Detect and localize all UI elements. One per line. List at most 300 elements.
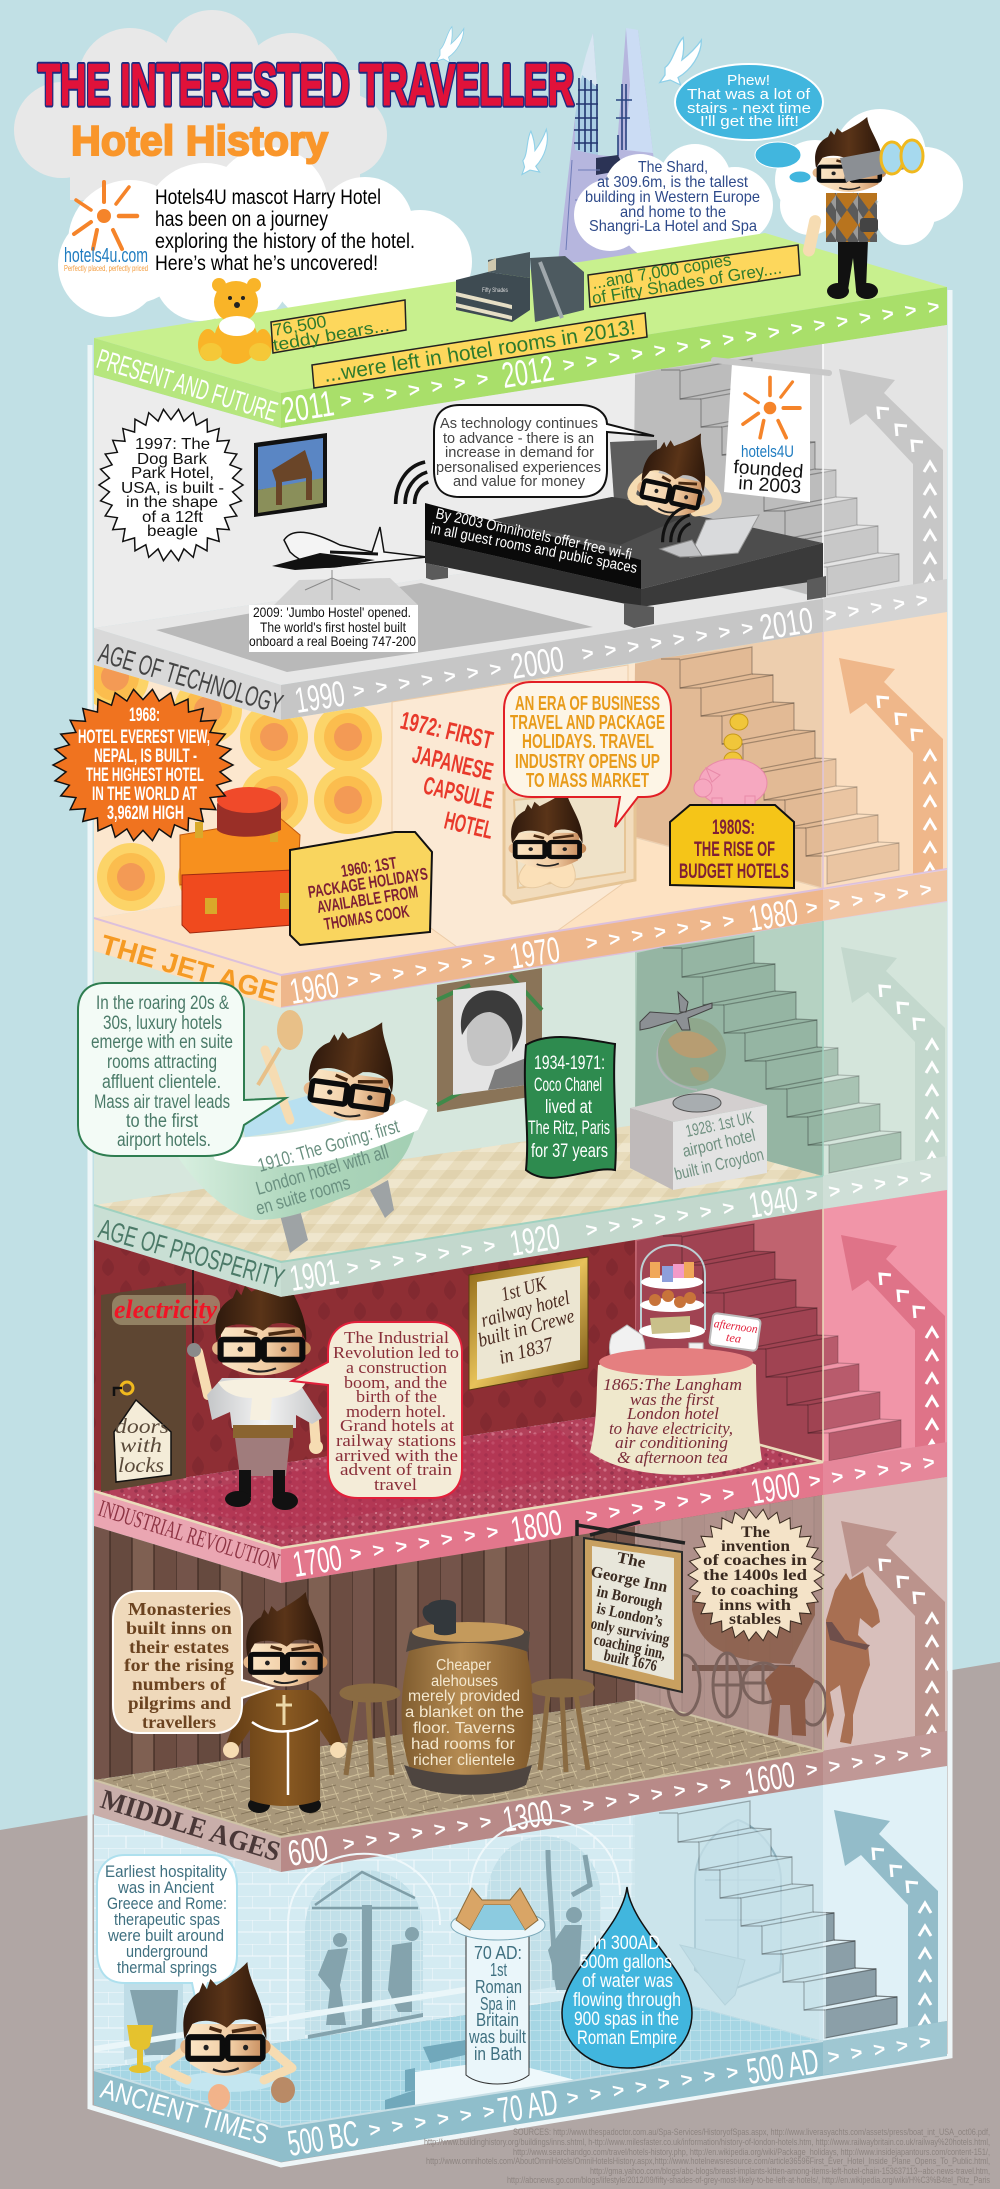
sign: Coco Chanel at the Ritz: Coco Chanel	[534, 1075, 602, 1096]
sign: Coco Chanel at the Ritz: The Ritz, Paris	[528, 1118, 610, 1139]
slab band: 1300	[500, 1792, 556, 1840]
sign: George Inn: only surviving	[589, 1615, 671, 1649]
icon: coins	[724, 714, 748, 768]
arrow	[839, 369, 943, 590]
pillar: Roman spa in Bath: Spa in	[480, 1994, 516, 2014]
slab band: >>>>>>>	[584, 1481, 747, 1528]
sign: Omnihotels wifi: By 2003 Omnihotels offer free wi-fi	[434, 505, 633, 563]
speech bubble: industrial revolution: a construction	[346, 1358, 448, 1377]
sign: George Inn	[577, 1520, 685, 1692]
slab band: 1920	[507, 1216, 563, 1264]
box: rise of budget hotels: BUDGET HOTELS	[679, 860, 789, 883]
icon: stack of books	[456, 252, 584, 322]
starburst: Hotel Everest View: IN THE WORLD AT	[92, 784, 197, 805]
stairs	[635, 902, 947, 1176]
speech bubble: earliest hospitality	[97, 1855, 237, 2012]
pedestal with globe: built in Croydon	[673, 1145, 766, 1184]
sign: Coco Chanel at the Ritz: for 37 years	[531, 1141, 608, 1162]
icon: teapot and cups	[610, 1325, 703, 1370]
speech bubble: roaring 20s: airport hotels.	[117, 1130, 211, 1151]
capsule pod	[504, 775, 635, 903]
Shard cloud and fact: and home to the	[620, 204, 726, 221]
icon: golden goblet	[127, 2025, 153, 2073]
speech bubble: technology: As technology continues	[440, 415, 598, 432]
speech bubble: monasteries: Monasteries	[128, 1599, 231, 1619]
barrel: merely provided	[408, 1688, 520, 1705]
plaque: Jumbo Hostel: The world's first hostel built	[260, 619, 406, 635]
table with cloth: 1865:The Langham	[603, 1375, 742, 1394]
starburst: invention of coaches	[688, 1509, 824, 1641]
tag: afternoon tea	[709, 1313, 761, 1351]
table with cloth: to have electricity,	[609, 1419, 733, 1438]
icon: key and door tag: locks	[118, 1453, 164, 1477]
pedestal with globe: airport hotel	[681, 1126, 757, 1161]
icon: suitcases	[180, 818, 300, 933]
slab band: >>>>>	[826, 2029, 944, 2069]
speech bubble: roaring 20s: Mass air travel leads	[94, 1092, 230, 1113]
bed	[425, 440, 826, 628]
painting: Coco Chanel	[437, 968, 542, 1112]
slab band: >>>>>	[823, 587, 941, 627]
banner: founded in 2003: founded	[733, 457, 804, 483]
barrel: floor. Taverns	[413, 1720, 515, 1737]
icon: piggy bank	[694, 759, 767, 812]
speech bubble: business travel	[504, 682, 671, 827]
speech bubble: roaring 20s: to the first	[126, 1111, 199, 1132]
arrow	[839, 658, 943, 879]
picture: railway hotel: in 1837	[497, 1333, 556, 1369]
starburst: invention of coaches: to coaching	[711, 1582, 798, 1599]
title cloud	[14, 10, 387, 200]
pillar: Roman spa in Bath	[451, 1888, 545, 2084]
room walls	[94, 325, 947, 685]
mascot with binoculars	[802, 117, 923, 299]
speech bubble: earliest hospitality: underground	[126, 1942, 208, 1961]
slab band: 600	[285, 1827, 331, 1874]
icon: doves	[437, 27, 701, 177]
icon: The Shard tower	[558, 28, 660, 262]
icon: laptop	[660, 515, 759, 557]
slab band: 1800	[508, 1501, 565, 1550]
roof band: PRESENT AND FUTURE	[93, 343, 281, 427]
slab band: ANCIENT TIMES	[97, 2073, 272, 2150]
room walls	[94, 902, 947, 1262]
water drop: Roman Empire fact: flowing through	[573, 1990, 681, 2011]
slab band: >>>>>>>>	[580, 615, 766, 666]
intro text	[155, 186, 415, 275]
sign: Coco Chanel at the Ritz: lived at	[545, 1097, 593, 1118]
speech bubble: industrial revolution: arrived with the	[335, 1446, 458, 1465]
speech bubble: Phew	[675, 64, 823, 183]
sign: George Inn: built 1676	[602, 1647, 659, 1675]
panel: age of prosperity room	[78, 902, 947, 1299]
logo: hotels4u.com: hotels4u.com	[64, 245, 148, 267]
mascot: monk	[223, 1592, 346, 1813]
wall arches and silhouettes	[124, 1820, 620, 2060]
icon: cake stand	[639, 1245, 705, 1339]
pillar: Roman spa in Bath: 70 AD:	[474, 1943, 522, 1963]
sources text	[424, 2127, 990, 2185]
starburst: invention of coaches: invention	[721, 1538, 790, 1555]
frame of building	[90, 290, 950, 2165]
intro text: Hotels4U mascot Harry Hotel	[155, 186, 381, 209]
room walls	[94, 1766, 947, 2127]
speech bubble: earliest hospitality: was in Ancient	[117, 1878, 214, 1897]
stairs	[635, 1190, 947, 1464]
arrow	[841, 947, 945, 1168]
speech bubble: industrial revolution: birth of the	[356, 1387, 437, 1406]
sign: left in hotel rooms: ...were left in hotel rooms in 2013!	[322, 316, 637, 387]
starburst: Dog Bark Park Hotel: beagle	[147, 523, 198, 540]
arrow	[841, 1235, 945, 1456]
banner: founded in 2003	[714, 360, 829, 502]
table with cloth: air conditioning	[615, 1433, 728, 1452]
table with cloth	[590, 1348, 762, 1475]
room walls	[94, 612, 947, 975]
sign: Fifty Shades: of Fifty Shades of Grey....	[591, 258, 783, 308]
speech bubble: monasteries: for the rising	[124, 1655, 234, 1675]
starburst: Dog Bark Park Hotel	[99, 409, 243, 561]
starburst: Hotel Everest View: 3,962M HIGH	[107, 803, 184, 824]
slab band: >>>>>>	[367, 2099, 508, 2142]
slab band	[94, 579, 947, 721]
sign: George Inn: is London’s	[595, 1600, 664, 1631]
arrow	[841, 1521, 945, 1742]
panel: roof, present and future	[93, 117, 952, 431]
pillar: Roman spa in Bath: Britain	[476, 2010, 519, 2030]
speech bubble: technology: personalised experiences	[436, 459, 601, 476]
slab band	[94, 1411, 948, 1585]
picture: railway hotel: 1st UK	[499, 1272, 550, 1306]
Shard cloud and fact: at 309.6m, is the tallest	[597, 174, 749, 191]
icon: key and door tag	[114, 1382, 171, 1482]
stairs	[633, 325, 947, 599]
speech bubble: business travel: TRAVEL AND PACKAGE	[510, 712, 665, 734]
text: electricity: electricity	[114, 1295, 217, 1324]
subtitle: Hotel History	[71, 117, 329, 164]
speech bubble: technology: to advance - there is an	[443, 430, 594, 447]
intro text: exploring the history of the hotel.	[155, 230, 415, 253]
stairs	[633, 612, 947, 889]
slab band	[94, 1495, 947, 1874]
text: 1972 capsule hotel	[398, 707, 496, 845]
title: THE INTERESTED TRAVELLER	[38, 53, 574, 118]
text: 1972 capsule hotel: HOTEL	[442, 807, 496, 845]
box: package holidays: PACKAGE HOLIDAYS	[307, 864, 429, 902]
starburst: Dog Bark Park Hotel: Dog Bark	[137, 451, 208, 468]
slab band: >>>>>>>	[345, 946, 508, 993]
water drop: Roman Empire fact: In 300AD	[593, 1933, 660, 1954]
slab band: AGE OF PROSPERITY	[95, 1213, 288, 1294]
icon: carriage and small horse	[668, 1595, 826, 1736]
pedestal with globe	[630, 1018, 767, 1190]
slab band	[94, 2021, 947, 2164]
picture: railway hotel: built in Crewe	[476, 1305, 577, 1352]
speech bubble: business travel: INDUSTRY OPENS UP	[515, 751, 660, 773]
slab band: AGE OF TECHNOLOGY	[95, 637, 287, 720]
speech bubble: monasteries	[113, 1591, 272, 1733]
text: 1972 capsule hotel: CAPSULE	[421, 772, 496, 815]
roof band: >>>>>>>>>>>>>>>>>	[561, 294, 952, 377]
text: 1972 capsule hotel: 1972: FIRST	[398, 707, 496, 755]
water drop: Roman Empire fact: Roman Empire	[577, 2028, 677, 2049]
text: 1972 capsule hotel: JAPANESE	[410, 741, 496, 786]
ground	[0, 1662, 1000, 2189]
icon: model plane	[640, 992, 712, 1030]
door	[101, 1283, 220, 1492]
box: rise of budget hotels: THE RISE OF	[694, 838, 775, 861]
starburst: Dog Bark Park Hotel: in the shape	[126, 494, 218, 511]
sign: George Inn: coaching inn,	[592, 1631, 667, 1663]
icon: teddy bear	[198, 278, 272, 364]
logo: hotels4u.com: Perfectly placed, perfectly priced	[64, 264, 148, 273]
table with cloth: London hotel	[626, 1404, 719, 1423]
speech bubble: industrial revolution: Revolution led to	[333, 1343, 459, 1362]
panel: middle ages room	[94, 1477, 947, 1874]
slab band: 500 AD	[744, 2040, 821, 2092]
intro text: has been on a journey	[155, 208, 328, 231]
plaque: Jumbo Hostel	[249, 604, 418, 652]
photo: dog hotel	[254, 433, 327, 517]
box: package holidays	[290, 832, 432, 945]
stairs	[631, 1801, 897, 2041]
pool steps and platform	[94, 1986, 594, 2118]
speech bubble: roaring 20s: affluent clientele.	[102, 1072, 221, 1093]
starburst: invention of coaches: inns with	[719, 1597, 791, 1614]
icon: key and door tag: with	[120, 1433, 162, 1457]
slab band: >>>>>>	[804, 877, 945, 920]
speech bubble: monasteries: numbers of	[132, 1674, 227, 1694]
speech bubble: industrial revolution: modern hotel.	[346, 1402, 446, 1421]
box: package holidays: AVAILABLE FROM	[316, 882, 419, 917]
icon: wifi	[396, 462, 428, 504]
slab band: 1940	[746, 1178, 801, 1226]
title: THE INTERESTED TRAVELLER	[38, 53, 574, 118]
speech bubble: industrial revolution: advent of train	[340, 1460, 453, 1479]
mascot in pool	[160, 1962, 295, 2110]
starburst: Dog Bark Park Hotel: Park Hotel,	[131, 465, 214, 482]
speech bubble: business travel: AN ERA OF BUSINESS	[515, 693, 660, 715]
bath with mascot: 1910: The Goring: first	[256, 1116, 402, 1177]
slab band: 2010	[757, 599, 816, 648]
thought cloud behind mascot	[775, 109, 963, 245]
bath with mascot: London hotel with all	[254, 1142, 391, 1200]
barrel: Cheaper	[436, 1657, 492, 1674]
box: package holidays: 1960: 1ST	[340, 853, 398, 881]
slab band: >>>>>>	[807, 1450, 948, 1493]
icon: stools	[342, 1681, 592, 1777]
slab band: >>>>>>>	[351, 656, 514, 703]
barrel: alehouses	[431, 1673, 498, 1690]
speech bubble: roaring 20s: In the roaring 20s &	[96, 993, 229, 1014]
speech bubble: industrial revolution	[292, 1322, 462, 1498]
speech bubble: roaring 20s	[78, 983, 286, 1156]
banner: founded in 2003: hotels4U	[741, 442, 794, 461]
roof band: 2011	[279, 382, 337, 431]
table with cloth: was the first	[630, 1390, 715, 1409]
sign: Fifty Shades: ...and 7,000 copies	[590, 250, 733, 293]
Shard cloud and fact: The Shard,	[638, 159, 708, 176]
starburst: Hotel Everest View: THE HIGHEST HOTEL	[86, 765, 204, 786]
speech bubble: Phew: I'll get the lift!	[700, 113, 799, 130]
room walls	[94, 1190, 947, 1548]
speech bubble: industrial revolution: The Industrial	[344, 1328, 449, 1347]
icon: key and door tag: doors	[115, 1414, 169, 1438]
sign: Omnihotels wifi	[425, 503, 641, 589]
slab band: 1960	[287, 964, 342, 1012]
speech bubble: earliest hospitality: therapeutic spas	[114, 1910, 220, 1929]
speech bubble: Phew: Phew!	[727, 72, 770, 89]
arrow	[834, 1810, 938, 2031]
barrel	[402, 1600, 533, 1795]
title	[38, 53, 574, 118]
slab band: >>>>>>>	[341, 1809, 504, 1856]
slab band	[94, 869, 947, 1012]
water drop: Roman Empire fact: 500m gallons	[580, 1952, 672, 1973]
box: rise of budget hotels	[670, 805, 794, 888]
room walls	[94, 1477, 947, 1837]
mascot: Victorian	[187, 1270, 323, 1510]
speech bubble: earliest hospitality: Greece and Rome:	[107, 1894, 227, 1913]
sign: 76,500 teddy bears: 76,500	[271, 312, 328, 340]
wallpaper circles	[94, 665, 382, 911]
speech bubble: roaring 20s: rooms attracting	[107, 1052, 217, 1073]
pedestal with globe: 1928: 1st UK	[684, 1108, 756, 1141]
speech bubble: technology: increase in demand for	[445, 444, 594, 461]
plaque: Jumbo Hostel: 2009: 'Jumbo Hostel' opened.	[253, 604, 411, 620]
barrel: had rooms for	[411, 1736, 516, 1753]
roof top	[94, 233, 947, 393]
starburst: Hotel Everest View	[53, 689, 233, 841]
logo: hotels4u.com	[64, 182, 148, 273]
subtitle cloud: intro	[58, 147, 472, 325]
sign: George Inn: The	[615, 1549, 647, 1572]
icon: plane on stand	[272, 527, 427, 605]
starburst: Hotel Everest View: HOTEL EVEREST VIEW,	[78, 727, 210, 748]
slab band: 1600	[742, 1754, 798, 1802]
tag: afternoon tea: afternoon	[713, 1316, 759, 1336]
table with cloth: & afternoon tea	[617, 1448, 728, 1467]
intro text: Here’s what he’s uncovered!	[155, 252, 378, 275]
panel: age of technology room	[94, 325, 947, 721]
speech bubble: industrial revolution: boom, and the	[344, 1373, 447, 1392]
slab band: >>>>>>>	[584, 908, 747, 955]
speech bubble: Phew: That was a lot of	[687, 86, 811, 103]
mascot on bed	[632, 423, 718, 522]
speech bubble: earliest hospitality: thermal springs	[117, 1958, 217, 1977]
sign: George Inn: George Inn	[589, 1563, 669, 1596]
slab band: 1900	[748, 1464, 803, 1512]
slab band: 1970	[507, 929, 563, 977]
slab band: 1980	[746, 891, 801, 939]
speech bubble: business travel: TO MASS MARKET	[526, 770, 649, 792]
panel: industrial revolution room	[94, 1190, 948, 1585]
speech bubble: earliest hospitality: were built around	[107, 1926, 224, 1945]
speech bubble: industrial revolution: railway stations	[336, 1431, 456, 1450]
box: package holidays: THOMAS COOK	[323, 902, 411, 934]
pillar: Roman spa in Bath: was built	[468, 2027, 526, 2047]
sign: Coco Chanel at the Ritz	[525, 1037, 616, 1178]
starburst: invention of coaches: The	[741, 1524, 770, 1541]
sign: Coco Chanel at the Ritz: 1934-1971:	[534, 1053, 605, 1074]
slab band: >>>>>>>	[348, 1519, 511, 1566]
speech bubble: technology: and value for money	[453, 473, 585, 490]
slab band: >>>>>>>	[584, 1195, 747, 1242]
Shard cloud and fact	[574, 144, 773, 260]
speech bubble: industrial revolution: travel	[374, 1475, 417, 1494]
sign: Omnihotels wifi: in all guest rooms and public spaces	[429, 520, 639, 577]
plaque: Jumbo Hostel: onboard a real Boeing 747-200	[249, 633, 416, 649]
roof band: >>>>>>>	[338, 366, 501, 413]
slab band: THE JET AGE	[97, 929, 281, 1008]
starburst: invention of coaches: stables	[729, 1611, 781, 1628]
slab band: 2000	[508, 638, 567, 687]
picture: railway hotel: railway hotel	[479, 1287, 573, 1332]
slab band: >>>>>>>>	[565, 2059, 751, 2110]
sign: 76,500 teddy bears: teddy bears...	[271, 316, 391, 355]
speech bubble: business travel: HOLIDAYS. TRAVEL	[522, 731, 654, 753]
slab band: 1990	[292, 673, 348, 721]
speech bubble: roaring 20s: 30s, luxury hotels	[103, 1013, 222, 1034]
starburst: invention of coaches: the 1400s led	[703, 1567, 807, 1584]
icon: stack of books: Fifty Shades	[482, 288, 508, 294]
starburst: Dog Bark Park Hotel: USA, is built -	[121, 480, 224, 497]
box: rise of budget hotels: 1980S:	[712, 816, 755, 839]
pillar: Roman spa in Bath: in Bath	[474, 2044, 522, 2064]
starburst: Dog Bark Park Hotel: of a 12ft	[142, 509, 204, 526]
speech bubble: industrial revolution: Grand hotels at	[340, 1416, 454, 1435]
icon: hat box	[217, 787, 281, 837]
slab band	[94, 1156, 947, 1299]
barrel: a blanket on the	[405, 1704, 524, 1721]
speech bubble: monasteries: built inns on	[126, 1618, 232, 1638]
icon: horse	[826, 1572, 880, 1744]
pillar: Roman spa in Bath: Roman	[475, 1977, 522, 1997]
panel: ancient times room	[94, 1766, 947, 2164]
tag: afternoon tea: tea	[725, 1330, 742, 1346]
bath with mascot: en suite rooms	[254, 1173, 353, 1220]
pillar: Roman spa in Bath: 1st	[490, 1960, 507, 1980]
Shard cloud and fact: Shangri-La Hotel and Spa	[589, 218, 757, 235]
speech bubble: earliest hospitality: Earliest hospitality	[105, 1862, 227, 1881]
barrel: richer clientele	[413, 1752, 515, 1769]
starburst: Dog Bark Park Hotel: 1997: The	[135, 436, 210, 453]
water drop: Roman Empire fact: of water was	[582, 1971, 673, 1992]
banner: founded in 2003: in 2003	[738, 473, 802, 498]
starburst: invention of coaches: of coaches in	[703, 1552, 807, 1569]
sign: 76,500 teddy bears	[271, 300, 406, 355]
icon: wifi by laptop	[663, 506, 690, 542]
speech bubble: roaring 20s: emerge with en suite	[91, 1032, 233, 1053]
sign: George Inn: in Borough	[595, 1583, 664, 1614]
speech bubble: monasteries: their estates	[129, 1637, 229, 1657]
slab band: 70 AD	[495, 2081, 561, 2131]
picture: railway hotel	[469, 1257, 588, 1390]
panel: jet age room	[53, 612, 947, 1012]
speech bubble: Phew: stairs - next time	[687, 100, 811, 117]
bath with mascot	[178, 1010, 428, 1253]
speech bubble: monasteries: pilgrims and	[128, 1693, 231, 1713]
starburst: Hotel Everest View: NEPAL, IS BUILT -	[94, 746, 197, 767]
slab band: MIDDLE AGES	[97, 1784, 284, 1868]
slab band: INDUSTRIAL REVOLUTION	[95, 1496, 283, 1576]
water drop: Roman Empire fact	[562, 1887, 692, 2068]
slab band: 500 BC	[285, 2112, 361, 2164]
speech bubble: monasteries: travellers	[142, 1712, 216, 1732]
starburst: Hotel Everest View: 1968:	[129, 705, 160, 726]
slab band: >>>>>>>	[345, 1233, 508, 1280]
water drop: Roman Empire fact: 900 spas in the	[574, 2009, 679, 2030]
